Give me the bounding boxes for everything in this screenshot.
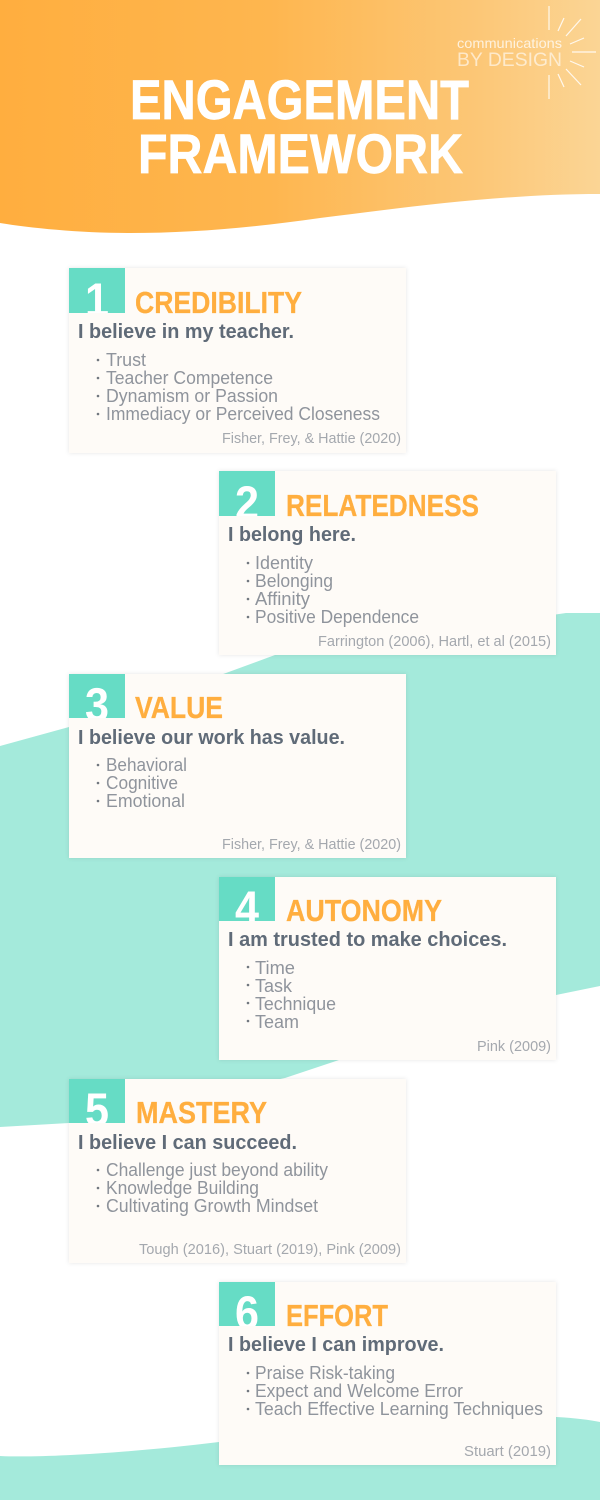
bullet list: Immediacy or Perceived Closeness — [106, 404, 380, 424]
heading: effort: EFFORT — [286, 1298, 388, 1333]
heading: autonomy: AUTONOMY — [286, 893, 442, 928]
bullet list: Expect and Welcome Error — [255, 1381, 463, 1401]
number badge 3 — [69, 674, 125, 731]
background: teal middle band — [0, 613, 600, 1127]
bullet list: Knowledge Building — [106, 1178, 259, 1198]
bullet list — [247, 1363, 543, 1419]
statement: I believe our work has value. — [78, 727, 345, 749]
bullet list: Affinity — [255, 589, 310, 609]
bullet list: Trust — [106, 350, 146, 370]
bullet list — [97, 755, 187, 811]
number badge 5: 5 — [85, 1083, 109, 1136]
logo: communications by design — [457, 6, 596, 99]
panel: 2 relatedness — [219, 471, 556, 655]
bullet list — [97, 1160, 328, 1216]
bullet list — [247, 553, 419, 627]
heading: mastery: MASTERY — [136, 1095, 267, 1130]
bullet list: Time — [255, 958, 295, 978]
citation: Tough (2016), Stuart (2019), Pink (2009) — [139, 1241, 401, 1258]
number badge 4 — [219, 877, 275, 934]
number badge 4: 4 — [235, 881, 259, 934]
bullet list: Praise Risk-taking — [255, 1363, 395, 1383]
statement: I belong here. — [228, 524, 356, 546]
number badge 3: 3 — [85, 678, 109, 731]
citation: Pink (2009) — [477, 1038, 551, 1055]
heading: relatedness: RELATEDNESS — [286, 488, 479, 523]
panel: 3 value — [69, 674, 406, 858]
number badge 5 — [69, 1079, 125, 1136]
panel: 5 mastery — [69, 1079, 406, 1263]
bullet list: Belonging — [255, 571, 333, 591]
bullet list — [247, 958, 336, 1032]
bullet list: Team — [255, 1012, 299, 1032]
bullet list: Technique — [255, 994, 336, 1014]
panel: 4 autonomy — [219, 877, 556, 1060]
bullet list: Dynamism or Passion — [106, 386, 278, 406]
title — [130, 68, 469, 185]
bullet list: Identity — [255, 553, 313, 573]
title: FRAMEWORK — [138, 122, 463, 185]
bullet list: Emotional — [106, 791, 185, 811]
statement: I believe I can improve. — [228, 1334, 444, 1356]
bullet list — [97, 350, 380, 424]
number badge 6: 6 — [235, 1286, 259, 1339]
statement: I believe in my teacher. — [78, 321, 294, 343]
number badge 1 — [69, 268, 125, 326]
number badge 2: 2 — [235, 476, 259, 529]
statement: I am trusted to make choices. — [228, 929, 507, 951]
panel: 1 credibility — [69, 268, 406, 453]
citation: Stuart (2019) — [464, 1443, 551, 1460]
citation: Fisher, Frey, & Hattie (2020) — [222, 836, 401, 853]
bullet list: Cultivating Growth Mindset — [106, 1196, 318, 1216]
bullet list: Positive Dependence — [255, 607, 419, 627]
bullet list: Teacher Competence — [106, 368, 273, 388]
bullet list: Challenge just beyond ability — [106, 1160, 328, 1180]
bullet list: Teach Effective Learning Techniques — [255, 1399, 543, 1419]
bullet list: Task — [255, 976, 293, 996]
title: ENGAGEMENT — [130, 68, 469, 131]
panel: 6 effort — [219, 1282, 556, 1465]
heading: credibility: CREDIBILITY — [135, 285, 302, 320]
bullet list: Cognitive — [106, 773, 178, 793]
background: teal bottom wave — [0, 1416, 600, 1500]
citation: Fisher, Frey, & Hattie (2020) — [222, 430, 401, 447]
statement: I believe I can succeed. — [78, 1132, 297, 1154]
number badge 6 — [219, 1282, 275, 1339]
number badge 2 — [219, 471, 275, 529]
bullet list: Behavioral — [106, 755, 187, 775]
citation: Farrington (2006), Hartl, et al (2015) — [318, 633, 551, 650]
logo: communications by design: BY DESIGN — [457, 50, 562, 71]
heading: value: VALUE — [135, 690, 223, 725]
logo: communications by design: communications — [457, 35, 562, 51]
header banner — [0, 0, 600, 233]
number badge 1: 1 — [85, 273, 109, 326]
